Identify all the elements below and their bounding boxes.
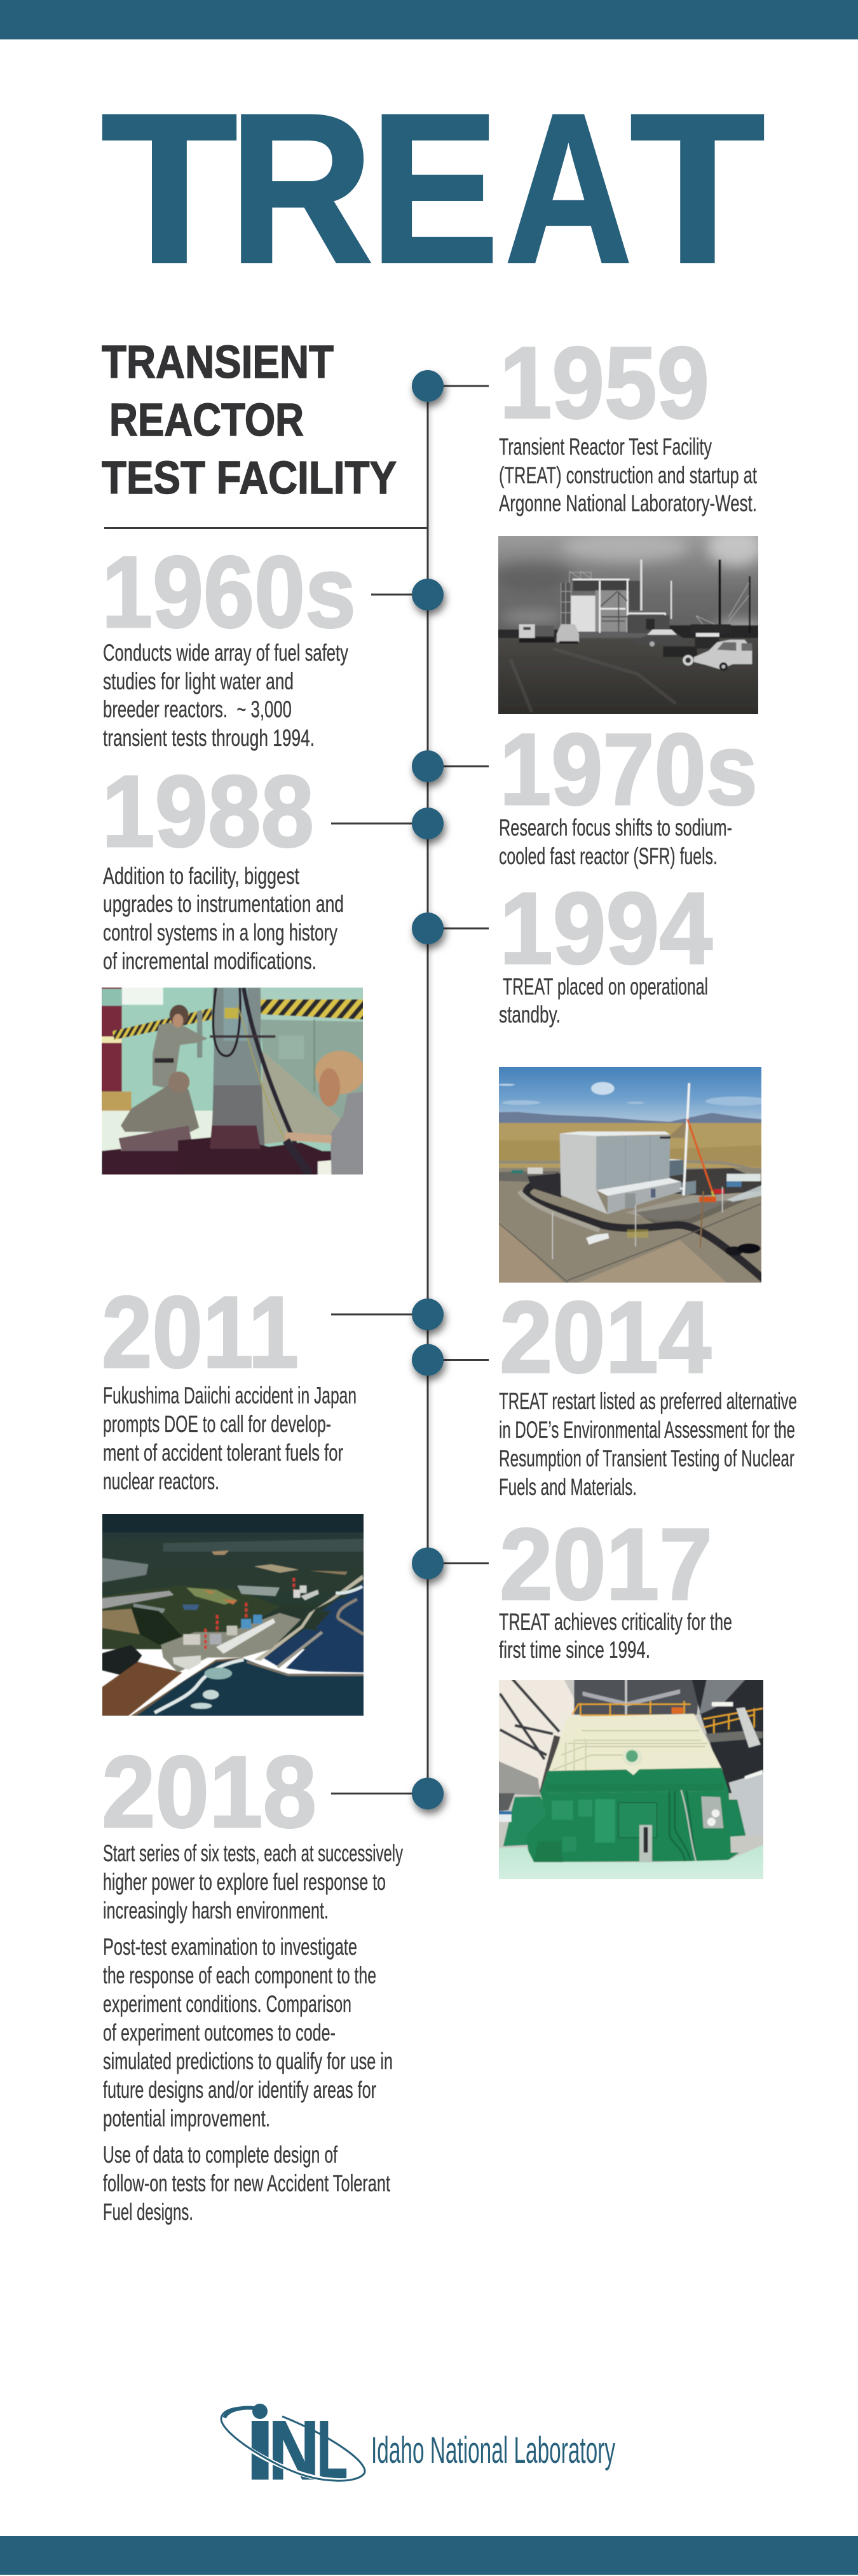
event: 1960s bbox=[102, 535, 444, 751]
logo letters INL bbox=[246, 2404, 348, 2497]
timeline spine bbox=[427, 386, 428, 1794]
year 2018: 2018 bbox=[102, 1735, 317, 1849]
dot 1988 bbox=[412, 808, 444, 839]
event: 2011 bbox=[102, 1275, 444, 1494]
description 1994: standby. bbox=[499, 1002, 561, 1028]
description 1970s: Research focus shifts to sodium- bbox=[499, 815, 732, 841]
title: T bbox=[101, 69, 238, 307]
description 1960s: studies for light water and bbox=[103, 668, 294, 694]
description 1988 bbox=[103, 863, 344, 974]
dot 2018 bbox=[412, 1778, 444, 1810]
description 2018: paragraph 2: potential improvement. bbox=[103, 2105, 270, 2132]
title: T bbox=[629, 69, 765, 307]
subtitle: line 2: REACTOR bbox=[109, 395, 304, 446]
description 1988: Addition to facility, biggest bbox=[103, 863, 300, 889]
logo letters INL: N bbox=[269, 2404, 319, 2497]
description 1959: Argonne National Laboratory-West. bbox=[499, 490, 757, 516]
description 2018: paragraph 3: Fuel designs. bbox=[103, 2199, 193, 2225]
description 1960s bbox=[103, 640, 348, 751]
description 2018: paragraph 2 bbox=[103, 1934, 393, 2132]
logo dot bbox=[252, 2404, 268, 2419]
description 2018: paragraph 1: higher power to explore fuel response to bbox=[103, 1869, 386, 1895]
photo: TREAT facility aerial bbox=[499, 1067, 761, 1283]
logo orbit swoosh bbox=[221, 2407, 365, 2481]
event: 1959 bbox=[412, 326, 757, 516]
event: 1994 bbox=[412, 871, 712, 1028]
subtitle block bbox=[102, 337, 397, 504]
description 1960s: transient tests through 1994. bbox=[103, 725, 315, 751]
description 2018: paragraph 2: experiment conditions. Comparison bbox=[103, 1991, 351, 2017]
description 1970s bbox=[499, 815, 732, 869]
subtitle: line 3: TEST FACILITY bbox=[102, 453, 397, 504]
description 2014 bbox=[499, 1388, 797, 1500]
connector 2017 bbox=[443, 1562, 489, 1564]
event: 2014 bbox=[412, 1280, 797, 1500]
connector 2014 bbox=[443, 1359, 489, 1361]
description 2014: Fuels and Materials. bbox=[499, 1474, 637, 1500]
title: E bbox=[370, 69, 499, 307]
event: 1970s bbox=[412, 712, 758, 869]
connector 1988 bbox=[331, 823, 412, 824]
description 2018: paragraph 2: Post-test examination to investigate bbox=[103, 1934, 357, 1960]
dot 2014 bbox=[412, 1344, 444, 1376]
dot 2017 bbox=[412, 1548, 444, 1580]
dot 1994 bbox=[412, 913, 444, 944]
description 1960s: Conducts wide array of fuel safety bbox=[103, 640, 348, 666]
connector 1994 bbox=[443, 927, 489, 930]
description 2018: paragraph 2: of experiment outcomes to code- bbox=[103, 2020, 336, 2046]
logo letters INL: L bbox=[317, 2404, 348, 2497]
description 2011: Fukushima Daiichi accident in Japan bbox=[103, 1382, 357, 1409]
subtitle divider bbox=[104, 527, 428, 529]
description 1988: of incremental modifications. bbox=[103, 948, 317, 974]
subtitle: line 1: TRANSIENT bbox=[102, 337, 334, 388]
title: R bbox=[229, 69, 373, 307]
description 2011: ment of accident tolerant fuels for bbox=[103, 1440, 343, 1466]
dot 1970s bbox=[412, 750, 444, 782]
bottom bar bbox=[0, 2536, 858, 2575]
connector 2011 bbox=[331, 1314, 412, 1315]
event: 2018 bbox=[102, 1735, 444, 2225]
connector 1959 bbox=[443, 385, 489, 387]
description 1959: Transient Reactor Test Facility bbox=[499, 434, 712, 460]
photo: Fukushima Daiichi aerial bbox=[102, 1514, 364, 1716]
description 1988: control systems in a long history bbox=[103, 920, 337, 946]
photo: 1959 construction site bbox=[498, 536, 758, 714]
photo: 1988 workers at reactor bbox=[102, 988, 363, 1174]
year 1970s: 1970s bbox=[500, 712, 758, 826]
year 2014: 2014 bbox=[500, 1280, 711, 1394]
connector 1960s bbox=[371, 594, 412, 595]
description 2018: paragraph 3 bbox=[103, 2142, 390, 2225]
description 1960s: breeder reactors. ~ 3,000 bbox=[103, 696, 292, 722]
year 1994: 1994 bbox=[500, 871, 712, 985]
event: 2017 bbox=[412, 1507, 732, 1663]
description 2018: paragraph 1 bbox=[103, 1840, 403, 1924]
logo letters INL: I bbox=[246, 2404, 274, 2497]
description 2018: paragraph 2: the response of each component to the bbox=[103, 1962, 376, 1988]
title: A bbox=[505, 69, 632, 307]
event: 1988 bbox=[102, 754, 444, 974]
year 1988: 1988 bbox=[102, 754, 314, 868]
timeline artwork bbox=[102, 345, 797, 2482]
description 2018: paragraph 3: follow-on tests for new Accident Tolerant bbox=[103, 2170, 390, 2196]
year 1960s: 1960s bbox=[102, 535, 356, 649]
description 2018: paragraph 2: simulated predictions to qualify for use in bbox=[103, 2048, 393, 2074]
description 2017 bbox=[499, 1609, 732, 1663]
dot 2011 bbox=[412, 1298, 444, 1330]
dot 1960s bbox=[412, 579, 444, 610]
connector 2018 bbox=[331, 1793, 412, 1794]
top bar bbox=[0, 0, 858, 39]
description 1959 bbox=[499, 434, 757, 516]
description 2018: paragraph 1: Start series of six tests, each at successively bbox=[103, 1840, 403, 1866]
description 1994: TREAT placed on operational bbox=[503, 974, 708, 1000]
description 1988: upgrades to instrumentation and bbox=[103, 891, 344, 917]
description 1994 bbox=[499, 974, 708, 1028]
description 2017: first time since 1994. bbox=[499, 1637, 650, 1663]
description 2011 bbox=[103, 1382, 357, 1494]
description 2017: TREAT achieves criticality for the bbox=[499, 1609, 732, 1635]
year 2011: 2011 bbox=[102, 1275, 299, 1389]
title bbox=[101, 69, 765, 307]
connector 1970s bbox=[443, 766, 489, 767]
logo: Idaho National Laboratory bbox=[221, 2404, 615, 2481]
year 1959: 1959 bbox=[500, 326, 709, 439]
year 2017: 2017 bbox=[500, 1507, 712, 1621]
description 2018: paragraph 3: Use of data to complete design of bbox=[103, 2142, 337, 2168]
description 1970s: cooled fast reactor (SFR) fuels. bbox=[499, 843, 718, 869]
photo: TREAT reactor hall bbox=[499, 1680, 763, 1879]
dot 1959 bbox=[412, 370, 444, 402]
description 2018: paragraph 2: future designs and/or identify areas for bbox=[103, 2077, 376, 2103]
description 2011: nuclear reactors. bbox=[103, 1468, 219, 1494]
logo wordmark: Idaho National Laboratory bbox=[371, 2430, 615, 2471]
description 2018: paragraph 1: increasingly harsh environment. bbox=[103, 1898, 329, 1924]
description 2011: prompts DOE to call for develop- bbox=[103, 1411, 331, 1437]
